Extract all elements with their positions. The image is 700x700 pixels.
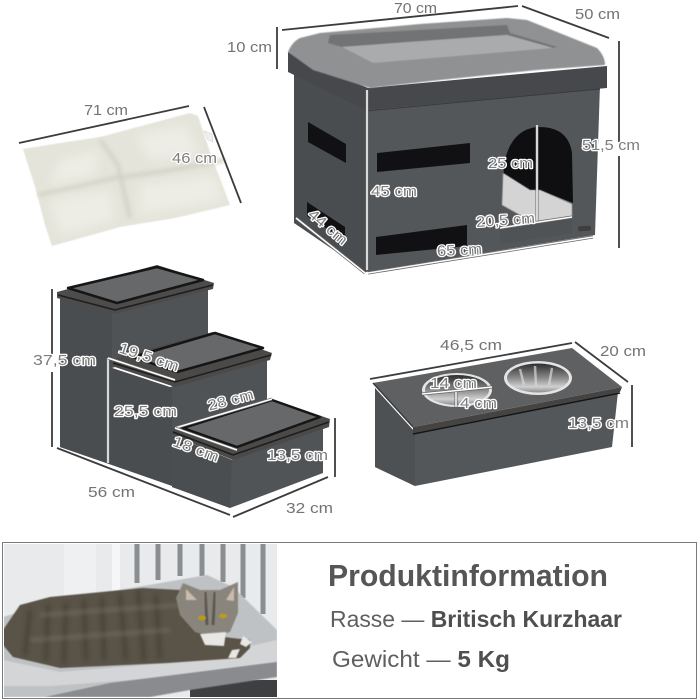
product: cat house: [288, 18, 607, 272]
dimension: bottom step depth: [170, 428, 237, 466]
text: breed: Rasse — Britisch Kurzhaar: [330, 606, 622, 632]
dimension: middle step depth: [108, 340, 181, 380]
dimension: inner width: [368, 237, 593, 273]
dimension: door width: [476, 210, 572, 231]
top tier lid: [57, 265, 214, 314]
mattress tag: [204, 131, 213, 142]
dimension: feeder length: 46,5 cm: [440, 337, 502, 354]
side strap upper: [308, 122, 346, 163]
grey bed: [3, 575, 277, 697]
dimension: mattress width: [172, 107, 241, 203]
dimension: feeder depth: 20 cm: [600, 343, 646, 360]
house front wall: [366, 85, 600, 272]
dimension: bottom step height: 13,5 cm: [267, 447, 328, 464]
front strap lower: [376, 225, 467, 255]
heading: Produktinformation: [328, 558, 608, 593]
grey cushion: [288, 18, 605, 88]
panel: product information frame: [2, 542, 696, 698]
product: feeding station: [373, 348, 622, 486]
dimension: house height: 51,5 cm: [582, 137, 640, 154]
cat head: [176, 582, 238, 637]
front strap upper: [377, 143, 470, 172]
dimension: inner depth: [296, 206, 365, 273]
dimension: house depth: 50 cm: [575, 6, 620, 23]
box lid edge: [413, 387, 622, 433]
middle tier lid: [112, 332, 272, 387]
dimension: lid height: [227, 27, 277, 69]
dimension: inner width: 65 cm: [437, 241, 482, 260]
top tier body: [60, 290, 208, 465]
middle tier carpet: [133, 333, 263, 372]
left bowl: [422, 373, 492, 407]
dimension: house width: 70 cm: [394, 0, 437, 17]
top tier carpet: [68, 267, 203, 303]
middle tier body: [112, 357, 267, 485]
bed front roll: [45, 662, 277, 697]
cushion seat: [342, 35, 553, 63]
box body: [375, 388, 618, 486]
lid: [288, 52, 607, 110]
dimension: feeder length: [370, 337, 572, 379]
photo: cat on bed: [3, 544, 280, 700]
cat eyes: [198, 616, 206, 620]
white bed inside door: [502, 173, 572, 222]
side strap lower: [307, 202, 345, 240]
wall: [4, 544, 277, 697]
cat chin and paws: [200, 632, 252, 658]
small logo badge: [578, 226, 591, 231]
dimension: bowl diameter: [422, 375, 492, 394]
cat stripes: [25, 590, 160, 664]
dimension: stairs length: 56 cm: [88, 484, 135, 501]
cat body: [3, 588, 250, 668]
dimension: mattress length: [19, 102, 189, 143]
dimension: bottom step width: 28 cm: [206, 386, 256, 415]
cushion inner wall: [328, 25, 557, 48]
text: weight: Gewicht — 5 Kg: [332, 646, 510, 672]
door sill: [500, 219, 572, 244]
dimension: feeder depth: [575, 342, 646, 382]
bed front seat: [3, 640, 277, 686]
dimension: house width: [282, 0, 518, 30]
door opening: [502, 127, 573, 203]
product: three step stairs: [57, 265, 330, 508]
dimension: house depth: [522, 6, 620, 38]
bottom tier lid: [172, 399, 330, 460]
dimension: stairs width: [233, 477, 333, 517]
dimension: mattress width: 46 cm: [172, 150, 217, 167]
dimension: bottom step depth: 18 cm: [170, 433, 221, 466]
house side wall: [294, 72, 366, 272]
dimension: door height: [488, 125, 537, 222]
dimension: bowl depth: [456, 392, 497, 412]
dimension: feeder height: 13,5 cm: [568, 415, 629, 432]
dimension: lid height: 10 cm: [227, 39, 272, 56]
dimension: stairs length: [57, 448, 230, 515]
dimension: bowl diameter: 14 cm: [430, 375, 477, 392]
dimension: mattress length: 71 cm: [84, 102, 128, 119]
dimension: stairs height: 37,5 cm: [33, 352, 96, 369]
product: mattress pad: [23, 113, 230, 246]
dimension: door height: 25 cm: [488, 155, 533, 172]
dimension: bottom step width: [175, 386, 272, 428]
dimension: inner height: 45 cm: [371, 183, 417, 200]
right bowl: [504, 361, 572, 395]
radiator bars: [137, 544, 263, 614]
bottom tier body: [172, 427, 323, 508]
dimension: middle step height: [108, 358, 177, 463]
bottom tier carpet: [183, 400, 320, 447]
dimension: feeder height: [568, 385, 632, 447]
dimension: door width: 20,5 cm: [476, 210, 536, 231]
dimension: bowl depth: 4 cm: [460, 395, 497, 412]
dimension: inner depth: 44 cm: [305, 206, 351, 249]
dimension: middle step depth: 19,5 cm: [117, 340, 181, 375]
dimension: stairs width: 32 cm: [286, 500, 333, 517]
dimension: middle step height: 25,5 cm: [114, 403, 177, 420]
dark floor: [190, 680, 277, 697]
box lid top: [373, 348, 622, 427]
dimension: bottom step height: [267, 418, 335, 477]
